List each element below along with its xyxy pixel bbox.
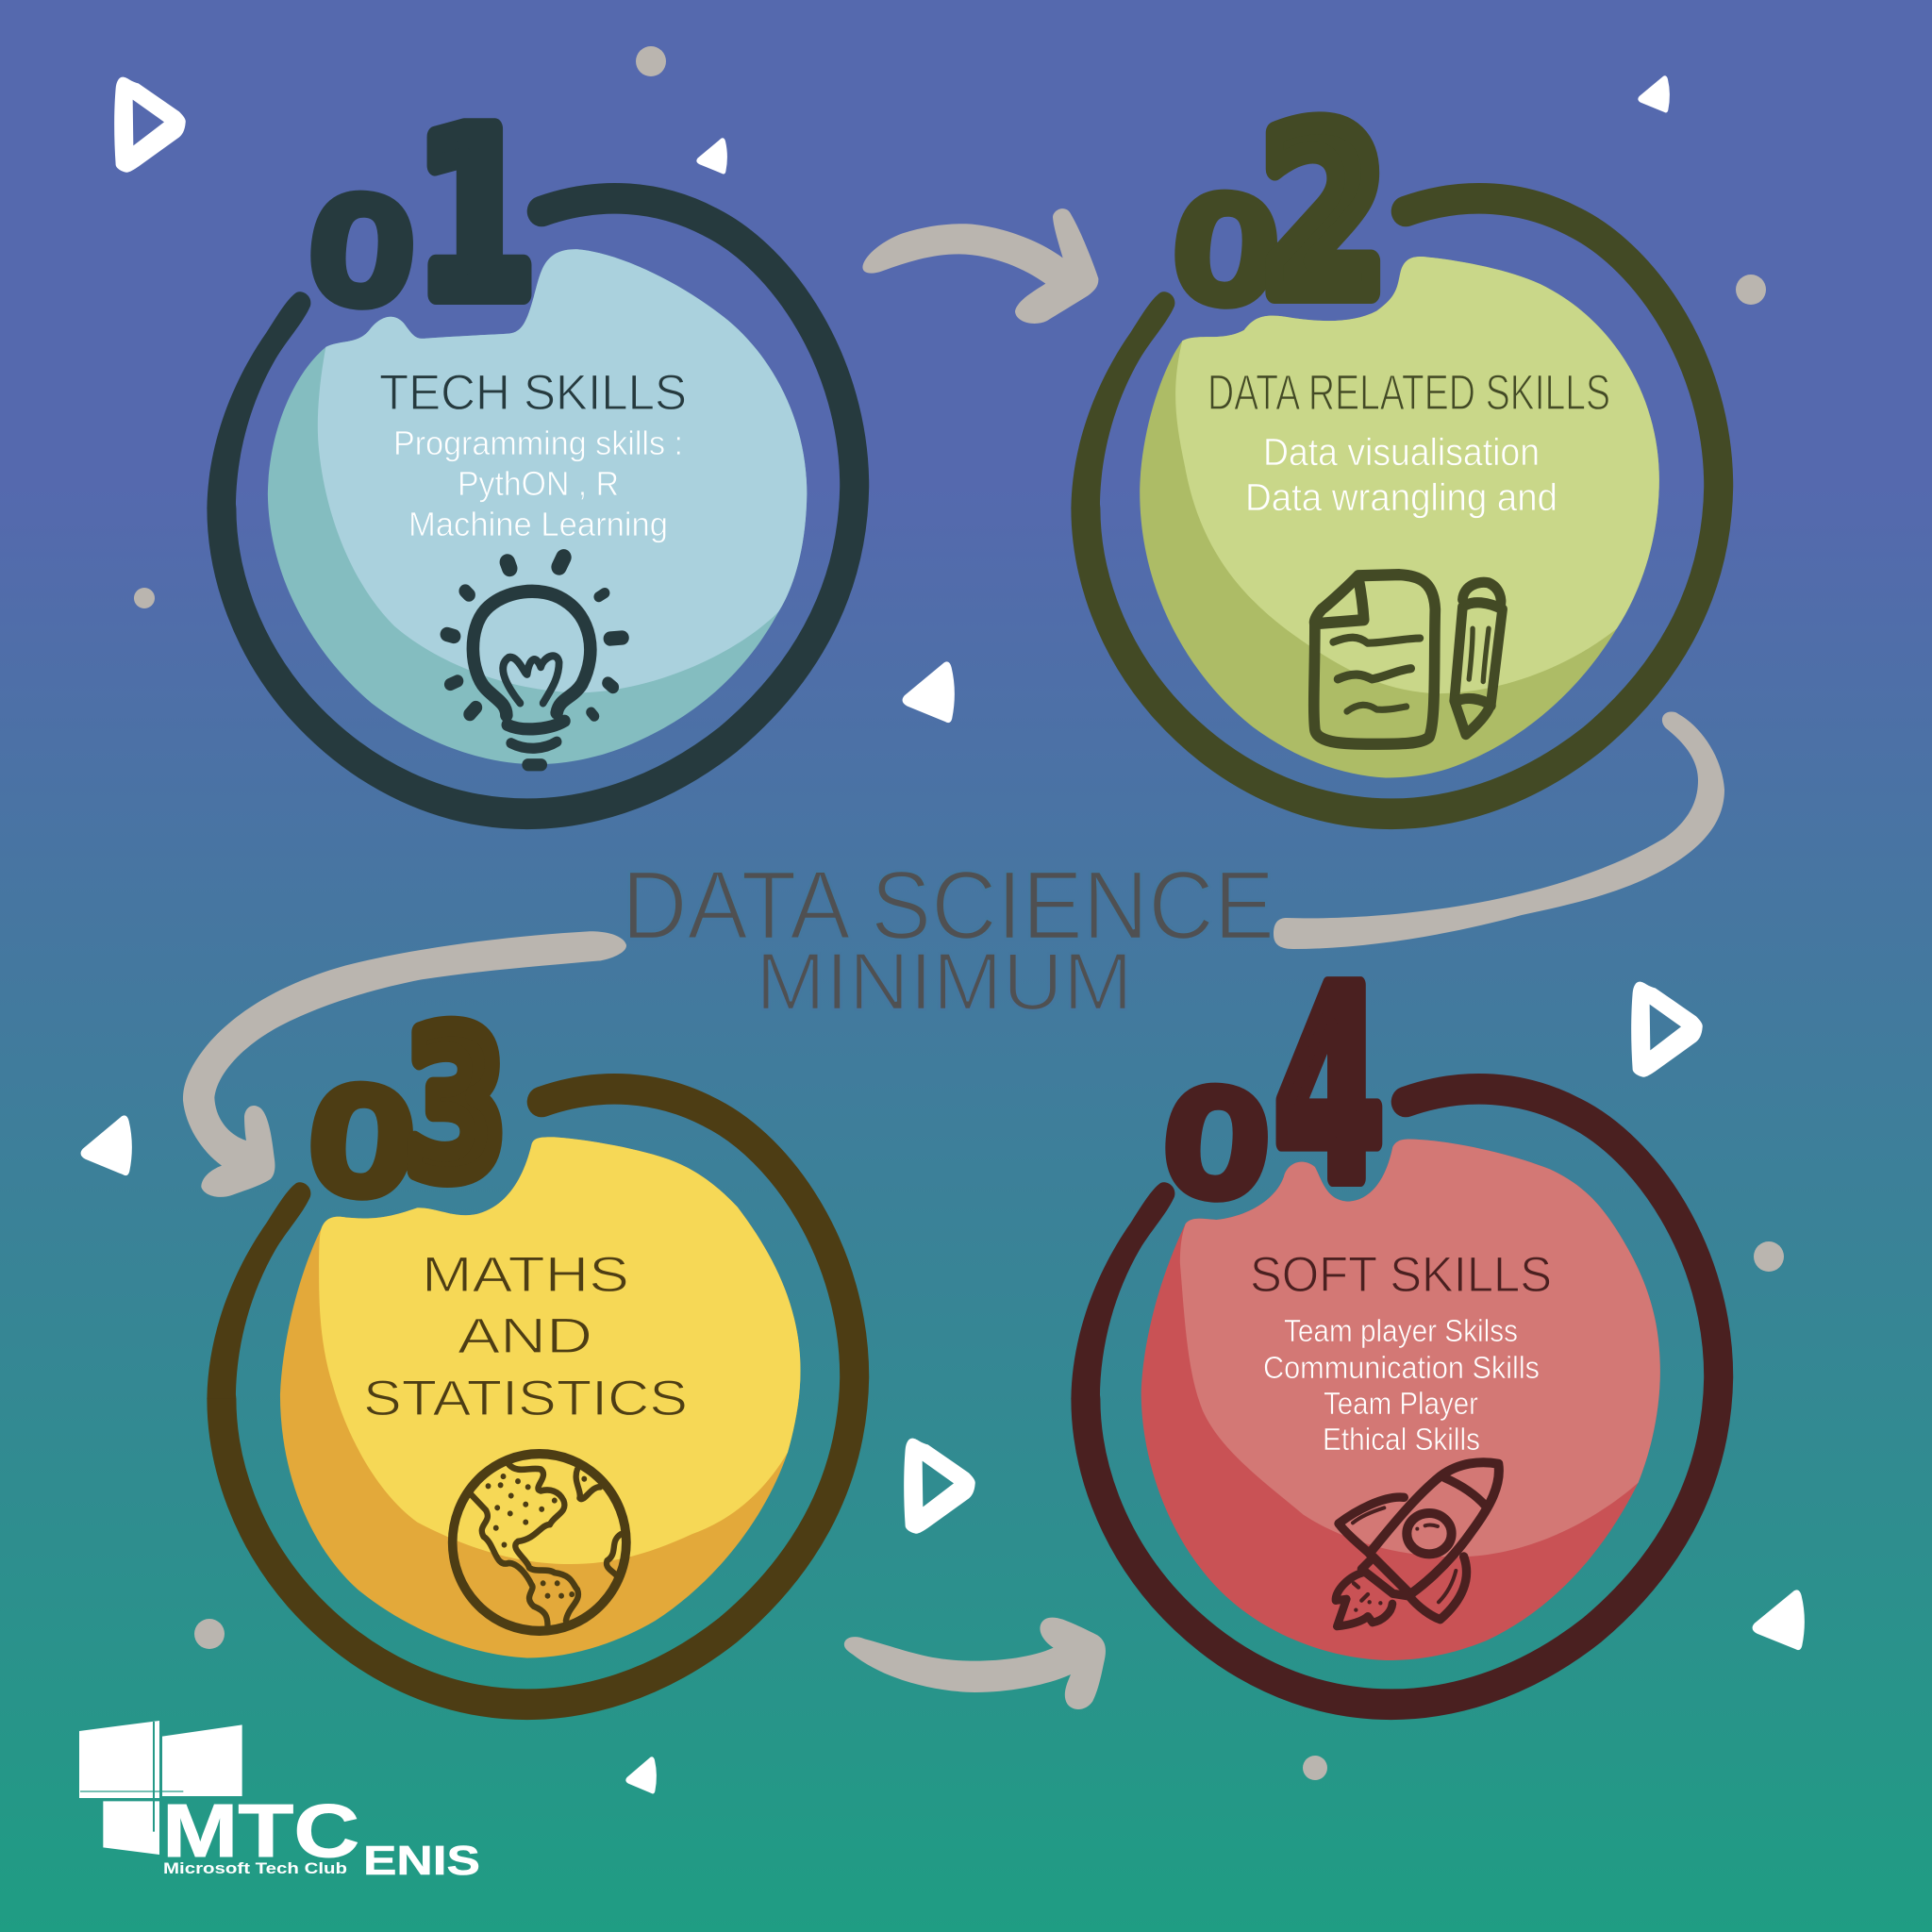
heading: maths and statistics: MATHS [422, 1247, 629, 1303]
arrow: title to step 3 [183, 931, 626, 1197]
ring: soft skills [1071, 1089, 1719, 1705]
logo wordmark [162, 1789, 480, 1884]
title: MINIMUM [756, 937, 1133, 1027]
icon: light bulb [447, 558, 622, 765]
logo wordmark: Microsoft Tech Club [163, 1859, 347, 1877]
logo wordmark: ENIS [363, 1838, 480, 1884]
number 01 [308, 84, 536, 348]
decoration: grey dots [134, 46, 1784, 1780]
number 01: 0 [308, 165, 416, 335]
number 02: 2 [1260, 81, 1387, 346]
panel: tech skills [207, 84, 855, 814]
icon: globe [453, 1454, 626, 1631]
text: soft skills list [1263, 1313, 1540, 1457]
icon: document and pencil [1314, 575, 1503, 744]
decoration: outlined play triangles [114, 77, 1703, 1534]
heading: tech skills: TECH SKILLS [379, 365, 687, 421]
blob: tech skills [268, 249, 807, 764]
title [622, 851, 1274, 1027]
number 03: 3 [405, 990, 507, 1222]
heading: soft skills: SOFT SKILLS [1250, 1247, 1552, 1303]
blob: maths and statistics [280, 1137, 801, 1657]
blob: soft skills [1141, 1140, 1660, 1660]
text: data related skills list: Data wrangling and [1245, 475, 1557, 519]
panel: data related skills [1071, 81, 1719, 814]
logo wordmark: MTC [162, 1789, 359, 1873]
text: tech skills list: Programming skills : [393, 424, 683, 462]
ring: tech skills [207, 198, 855, 814]
arrow: step 1 to 2 [862, 208, 1098, 324]
ring: data related skills [1071, 198, 1719, 814]
number 04: 0 [1162, 1058, 1271, 1227]
decoration: solid triangles [81, 75, 1805, 1793]
text: data related skills list: Data visualisation [1263, 430, 1540, 474]
number 02 [1172, 81, 1387, 346]
heading: maths and statistics: AND [458, 1308, 592, 1364]
number 02: 0 [1172, 164, 1280, 334]
text: data related skills list [1245, 430, 1557, 519]
text: soft skills list: Ethical Skills [1323, 1422, 1480, 1457]
text: tech skills list: Machine Learning [408, 505, 668, 543]
heading: maths and statistics: STATISTICS [363, 1371, 688, 1426]
text: tech skills list [393, 424, 683, 543]
number 04 [1162, 932, 1385, 1241]
heading: maths and statistics [363, 1247, 688, 1426]
arrow: step 2 to title [1274, 712, 1724, 949]
text: tech skills list: PythON , R [458, 464, 619, 503]
icon: rocket [1336, 1462, 1499, 1626]
logo: MTC ENIS [79, 1721, 480, 1884]
number 03: 0 [308, 1056, 416, 1225]
heading: data related skills: DATA RELATED SKILLS [1208, 365, 1610, 421]
title: DATA SCIENCE [622, 851, 1274, 959]
logo windows mark [79, 1721, 242, 1855]
number 04: 4 [1274, 932, 1385, 1241]
arrow: step 3 to 4 [844, 1618, 1106, 1709]
ring: maths and statistics [207, 1089, 855, 1705]
text: soft skills list: Team Player [1324, 1386, 1478, 1421]
panel: maths and statistics [207, 990, 855, 1705]
number 03 [308, 990, 507, 1225]
blob: data related skills [1140, 257, 1659, 777]
number 01: 1 [415, 84, 536, 348]
text: soft skills list: Communication Skills [1263, 1350, 1540, 1385]
panel: soft skills [1071, 932, 1719, 1705]
text: soft skills list: Team player Skilss [1284, 1313, 1518, 1348]
